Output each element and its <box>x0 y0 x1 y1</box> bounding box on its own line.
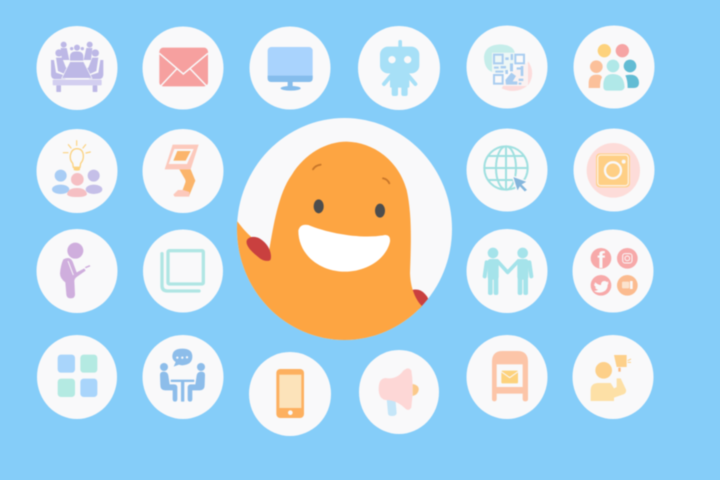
icon: person with megaphone <box>572 335 654 419</box>
mascot: left hand <box>247 237 271 261</box>
icon: idea team <box>36 129 118 213</box>
infographic canvas <box>36 24 656 437</box>
icon: instagram <box>574 128 654 212</box>
icon: QR code <box>466 26 548 108</box>
mascot: right eye <box>375 204 385 218</box>
icon: mailbox <box>466 335 548 419</box>
mascot: orange body <box>236 140 422 341</box>
icon: handshake <box>466 229 548 313</box>
icon: globe with cursor <box>466 128 548 212</box>
icon: monitor <box>250 26 330 110</box>
icon: megaphone <box>359 350 439 434</box>
icon: social media buttons <box>572 230 654 312</box>
icon: person with phone <box>36 229 118 313</box>
mascot: central smiling character <box>230 118 452 350</box>
mascot: left eyebrow <box>313 165 321 169</box>
icon: meeting at table <box>142 335 224 419</box>
mascot: smile <box>298 225 390 272</box>
icon: app grid <box>37 335 117 419</box>
mascot: right eyebrow <box>383 178 389 183</box>
icon: smartphone <box>249 352 331 436</box>
icon: robot <box>358 26 440 110</box>
mascot: right hand <box>412 289 429 311</box>
icon: stacked layers <box>143 230 223 312</box>
icon: people group <box>574 26 654 108</box>
mascot: left eye <box>314 199 324 213</box>
icon: social media buttons: f <box>597 247 605 273</box>
icon: kiosk <box>142 129 224 213</box>
icon: envelope <box>142 26 224 110</box>
icon: conference meeting <box>36 26 118 110</box>
